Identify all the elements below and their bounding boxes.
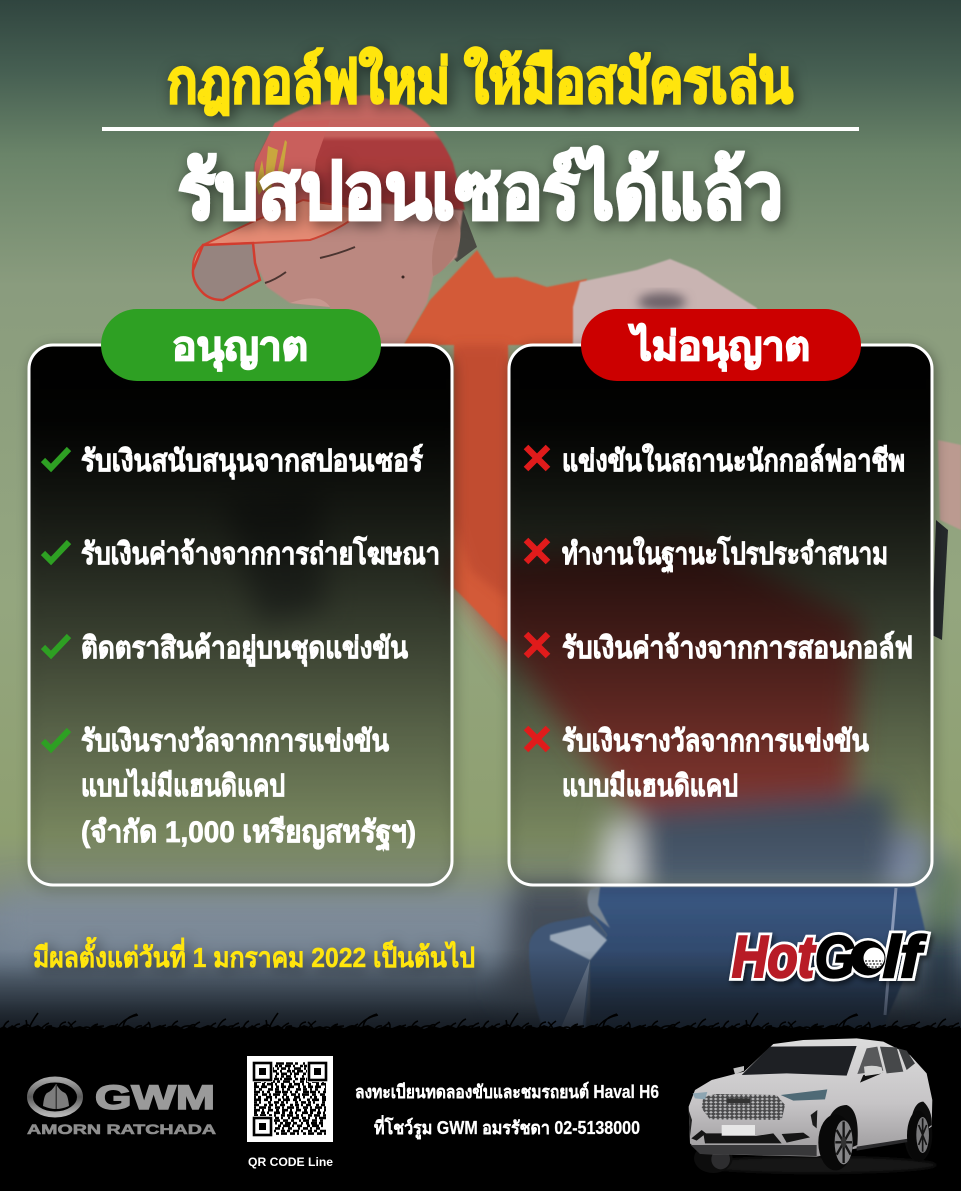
panel: allowed xyxy=(29,309,452,885)
effective date note: มีผลตั้งแต่วันที่ 1 มกราคม 2022 เป็นต้นไป xyxy=(33,936,475,973)
not allowed item 4: แบบมีแฮนดิแคป xyxy=(562,770,738,803)
shirt xyxy=(403,250,587,644)
footer with grass edge xyxy=(0,1011,961,1191)
not allowed item 4: รับเงินรางวัลจากการแข่งขัน xyxy=(562,725,869,758)
footer contact line 2: ที่โชว์รูม GWM อมรรัชดา 02-5138000 xyxy=(374,1115,640,1140)
arm xyxy=(573,259,760,350)
allowed item 4 xyxy=(43,725,416,852)
QR caption: QR CODE Line xyxy=(248,1155,333,1169)
car: Haval H6 xyxy=(689,1038,937,1173)
trousers xyxy=(590,887,925,1035)
pill heading: not allowed: ไม่อนุญาต xyxy=(628,323,810,372)
face xyxy=(253,203,463,345)
pill heading: allowed xyxy=(101,309,381,381)
title divider xyxy=(102,127,859,131)
GWM wordmark: GWM xyxy=(95,1079,215,1117)
golf ball xyxy=(864,948,884,968)
logo: HotGolf: lf xyxy=(883,925,927,990)
logo: HotGolf: Hot xyxy=(732,925,816,990)
not allowed item 4 xyxy=(526,725,869,803)
logo: HotGolf: G xyxy=(815,925,855,990)
not allowed item 1: แข่งขันในสถานะนักกอล์ฟอาชีพ xyxy=(562,443,905,478)
not allowed item 2: ทำงานในฐานะโปรประจำสนาม xyxy=(562,535,888,574)
bottom darkening xyxy=(0,950,961,1035)
logo: GWM Amorn Ratchada xyxy=(27,1079,216,1137)
right hands and club xyxy=(938,440,961,530)
not allowed item 2 xyxy=(526,535,888,574)
cap brim top xyxy=(193,200,355,270)
title: second line: รับสปอนเซอร์ได้แล้ว xyxy=(178,146,783,235)
hair xyxy=(440,205,477,262)
title: top line: กฎกอล์ฟใหม่ ให้มือสมัครเล่น xyxy=(167,47,793,115)
not allowed item 3: รับเงินค่าจ้างจากการสอนกอล์ฟ xyxy=(562,631,913,665)
panel: not allowed xyxy=(509,309,932,885)
dealer name: AMORN RATCHADA xyxy=(27,1121,216,1137)
eyes and mole xyxy=(265,247,355,283)
QR code xyxy=(247,1056,333,1142)
allowed item 2: รับเงินค่าจ้างจากการถ่ายโฆษณา xyxy=(81,535,440,571)
logo: HotGolf: Hot xyxy=(732,925,816,990)
allowed item 4: แบบไม่มีแฮนดิแคป xyxy=(81,768,285,803)
allowed item 4: (จำกัด 1,000 เหรียญสหรัฐฯ) xyxy=(81,816,416,852)
blurred body and lower scene xyxy=(0,490,961,1010)
logo: HotGolf: lf xyxy=(883,925,927,990)
footer contact line 1: ลงทะเบียนทดลองขับและชมรถยนต์ Haval H6 xyxy=(355,1081,659,1102)
logo: HotGolf xyxy=(732,925,927,990)
cap brim underside xyxy=(193,243,260,300)
logo: HotGolf: G xyxy=(815,925,855,990)
GWM emblem xyxy=(30,1080,80,1114)
cap logo xyxy=(256,140,287,195)
pill heading: not allowed xyxy=(581,309,861,381)
allowed item 1: รับเงินสนับสนุนจากสปอนเซอร์ xyxy=(81,444,423,480)
cap crown xyxy=(250,95,465,223)
allowed item 3: ติดตราสินค้าอยู่บนชุดแข่งขัน xyxy=(81,632,408,667)
pill heading: allowed: อนุญาต xyxy=(172,325,308,372)
allowed item 4: รับเงินรางวัลจากการแข่งขัน xyxy=(81,725,389,758)
